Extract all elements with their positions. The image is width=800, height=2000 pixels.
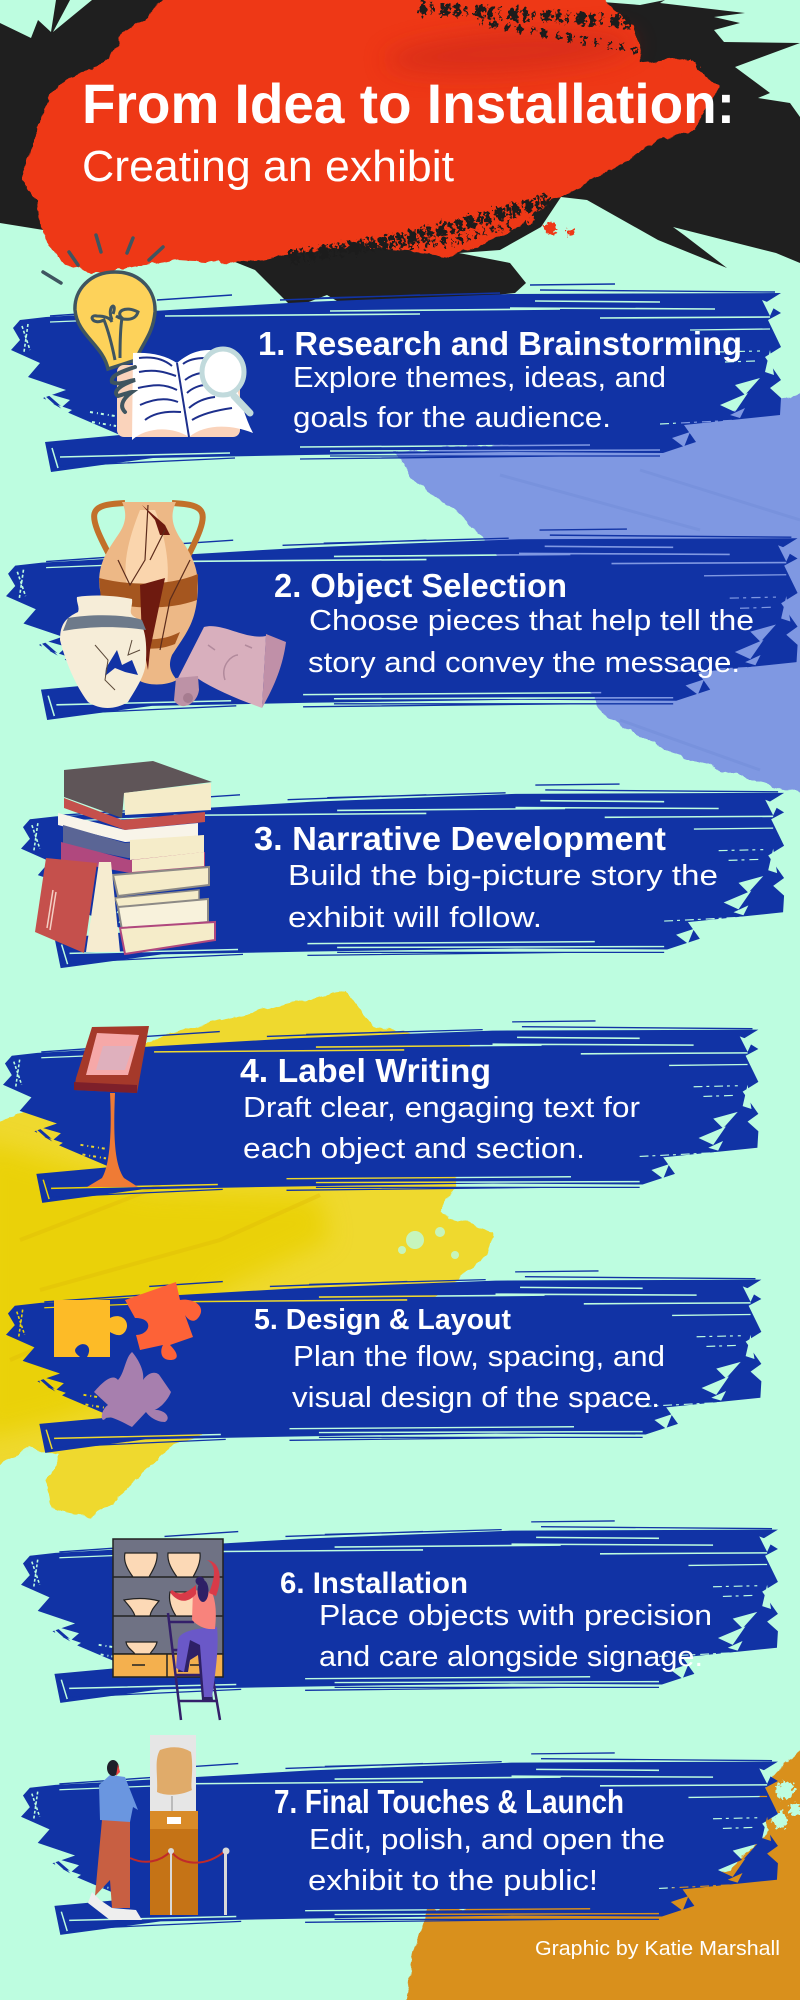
description: story and convey the message.: [308, 647, 740, 679]
description: goals for the audience.: [293, 402, 611, 434]
paint: yellow brush stroke: [0, 990, 495, 1517]
panel: step 4: [3, 1021, 758, 1203]
description: Explore themes, ideas, and: [293, 362, 666, 394]
panel: step 5: [6, 1271, 761, 1453]
banner: [6, 529, 798, 720]
description: visual design of the space.: [292, 1382, 660, 1414]
description: [308, 605, 754, 679]
panel: step 2: [6, 502, 798, 720]
description: [293, 362, 666, 434]
icon: cabinet with curator on ladder: [113, 1539, 223, 1720]
paint: black brush stroke: [0, 0, 800, 310]
banner: [11, 284, 781, 472]
icon: exhibit case and visitor: [88, 1735, 230, 1920]
paint: periwinkle brush stroke: [395, 385, 800, 800]
banner: [21, 1753, 778, 1935]
panel: step 3: [21, 761, 784, 968]
description: Build the big-picture story the: [288, 860, 718, 892]
icon: light bulb: [43, 235, 163, 369]
description: [243, 1092, 640, 1165]
heading: 4. Label Writing: [240, 1052, 491, 1089]
icon: puzzle pieces: [54, 1282, 201, 1427]
subtitle: Creating an exhibit: [82, 142, 454, 191]
title block: [82, 72, 735, 191]
heading: 5. Design & Layout: [254, 1304, 511, 1336]
description: [319, 1600, 712, 1673]
panel: step 1: [11, 235, 781, 472]
banner: [21, 784, 784, 968]
description: Draft clear, engaging text for: [243, 1092, 640, 1124]
heading: 2. Object Selection: [274, 567, 567, 604]
description: [308, 1824, 665, 1897]
description: and care alongside signage.: [319, 1641, 703, 1673]
description: exhibit to the public!: [308, 1865, 598, 1897]
description: each object and section.: [243, 1133, 585, 1165]
banner: [21, 1521, 778, 1703]
description: Place objects with precision: [319, 1600, 712, 1632]
panel: step 7: [21, 1735, 778, 1935]
description: exhibit will follow.: [288, 902, 542, 934]
description: [292, 1341, 665, 1414]
paint: red brush stroke: [23, 0, 719, 273]
icon: book stack: [35, 761, 215, 954]
credit: Graphic by Katie Marshall: [535, 1938, 780, 1960]
heading: 3. Narrative Development: [254, 820, 666, 857]
description: Plan the flow, spacing, and: [293, 1341, 665, 1373]
icon: white urn: [60, 596, 146, 708]
title: From Idea to Installation:: [82, 72, 735, 135]
panel: step 6: [21, 1521, 778, 1720]
banner: [3, 1021, 758, 1203]
heading: 7. Final Touches & Launch: [274, 1783, 624, 1820]
description: [288, 860, 718, 934]
icon: open book with magnifier: [112, 349, 253, 440]
icon: broken vase: [94, 502, 203, 684]
heading: 6. Installation: [280, 1567, 468, 1600]
heading: 1. Research and Brainstorming: [258, 325, 742, 362]
icon: label lectern: [74, 1026, 149, 1187]
banner: [6, 1271, 761, 1453]
description: Edit, polish, and open the: [309, 1824, 665, 1856]
paint: orange brush stroke: [403, 1745, 800, 2000]
icon: scroll: [174, 626, 286, 708]
description: Choose pieces that help tell the: [309, 605, 754, 637]
